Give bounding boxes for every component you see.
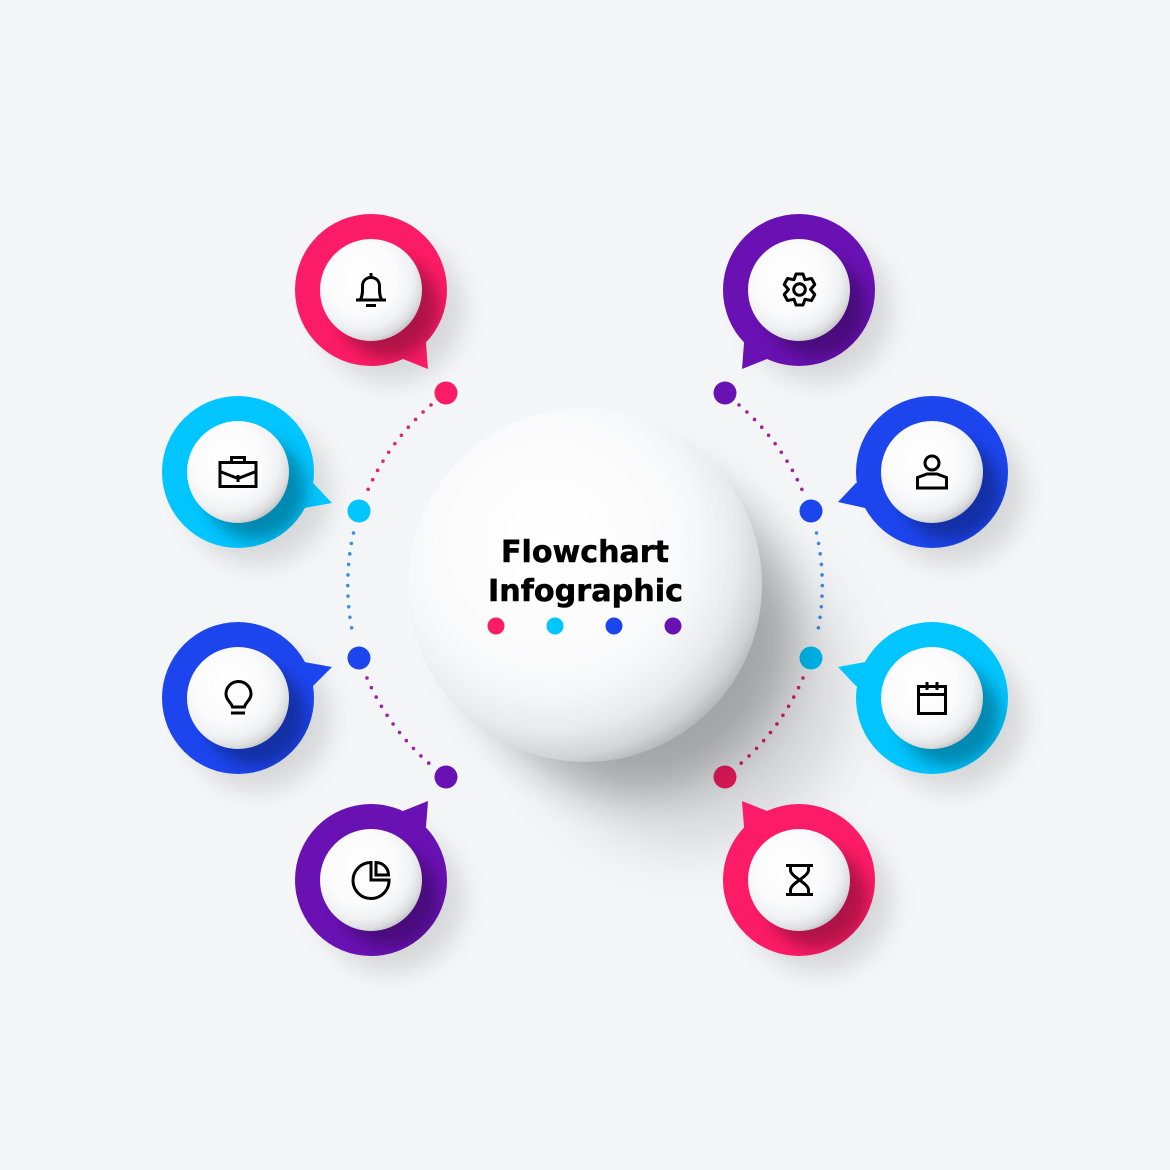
icon: hourglass	[786, 866, 813, 894]
node dot: blue left	[348, 646, 370, 670]
node dot: purple lower left	[434, 766, 458, 788]
bubble: gear, purple	[723, 214, 891, 382]
icon: pie chart	[353, 862, 389, 898]
icon: person	[918, 456, 946, 488]
bubble: person, blue	[838, 396, 1024, 564]
dotted connector: upper left arc	[367, 405, 431, 492]
node dot: pink upper left	[434, 382, 458, 404]
bubble: light bulb, blue	[162, 622, 332, 790]
icon: gear	[784, 274, 815, 305]
icon: bell	[356, 273, 386, 306]
bubble: hourglass, pink	[723, 801, 891, 972]
title: Flowchart	[501, 535, 669, 570]
bubble: briefcase, cyan	[162, 396, 332, 564]
legend dots	[488, 618, 682, 634]
title	[488, 535, 683, 609]
node dot: pink lower right	[714, 766, 736, 788]
bubble: pie chart, purple	[295, 801, 463, 972]
dotted connector: lower left arc	[367, 678, 431, 765]
icon: calendar	[918, 682, 946, 714]
node dot: cyan right	[800, 646, 822, 670]
title: Infographic	[488, 574, 683, 609]
node dot: purple upper right	[714, 382, 736, 404]
icon: briefcase	[220, 458, 256, 486]
node dot: cyan left	[348, 500, 370, 522]
dotted connector: upper right arc	[739, 405, 803, 492]
bubble: bell, pink	[295, 214, 463, 382]
dotted connector: middle left arc	[348, 533, 354, 637]
dotted connector: middle right arc	[816, 533, 822, 637]
bubble: calendar, cyan	[838, 622, 1024, 790]
icon: light bulb	[226, 682, 251, 713]
central sphere	[408, 408, 762, 762]
dotted connector: lower right arc	[739, 678, 803, 765]
node dot: blue right	[800, 500, 822, 522]
central sphere cast shadow	[457, 457, 840, 840]
